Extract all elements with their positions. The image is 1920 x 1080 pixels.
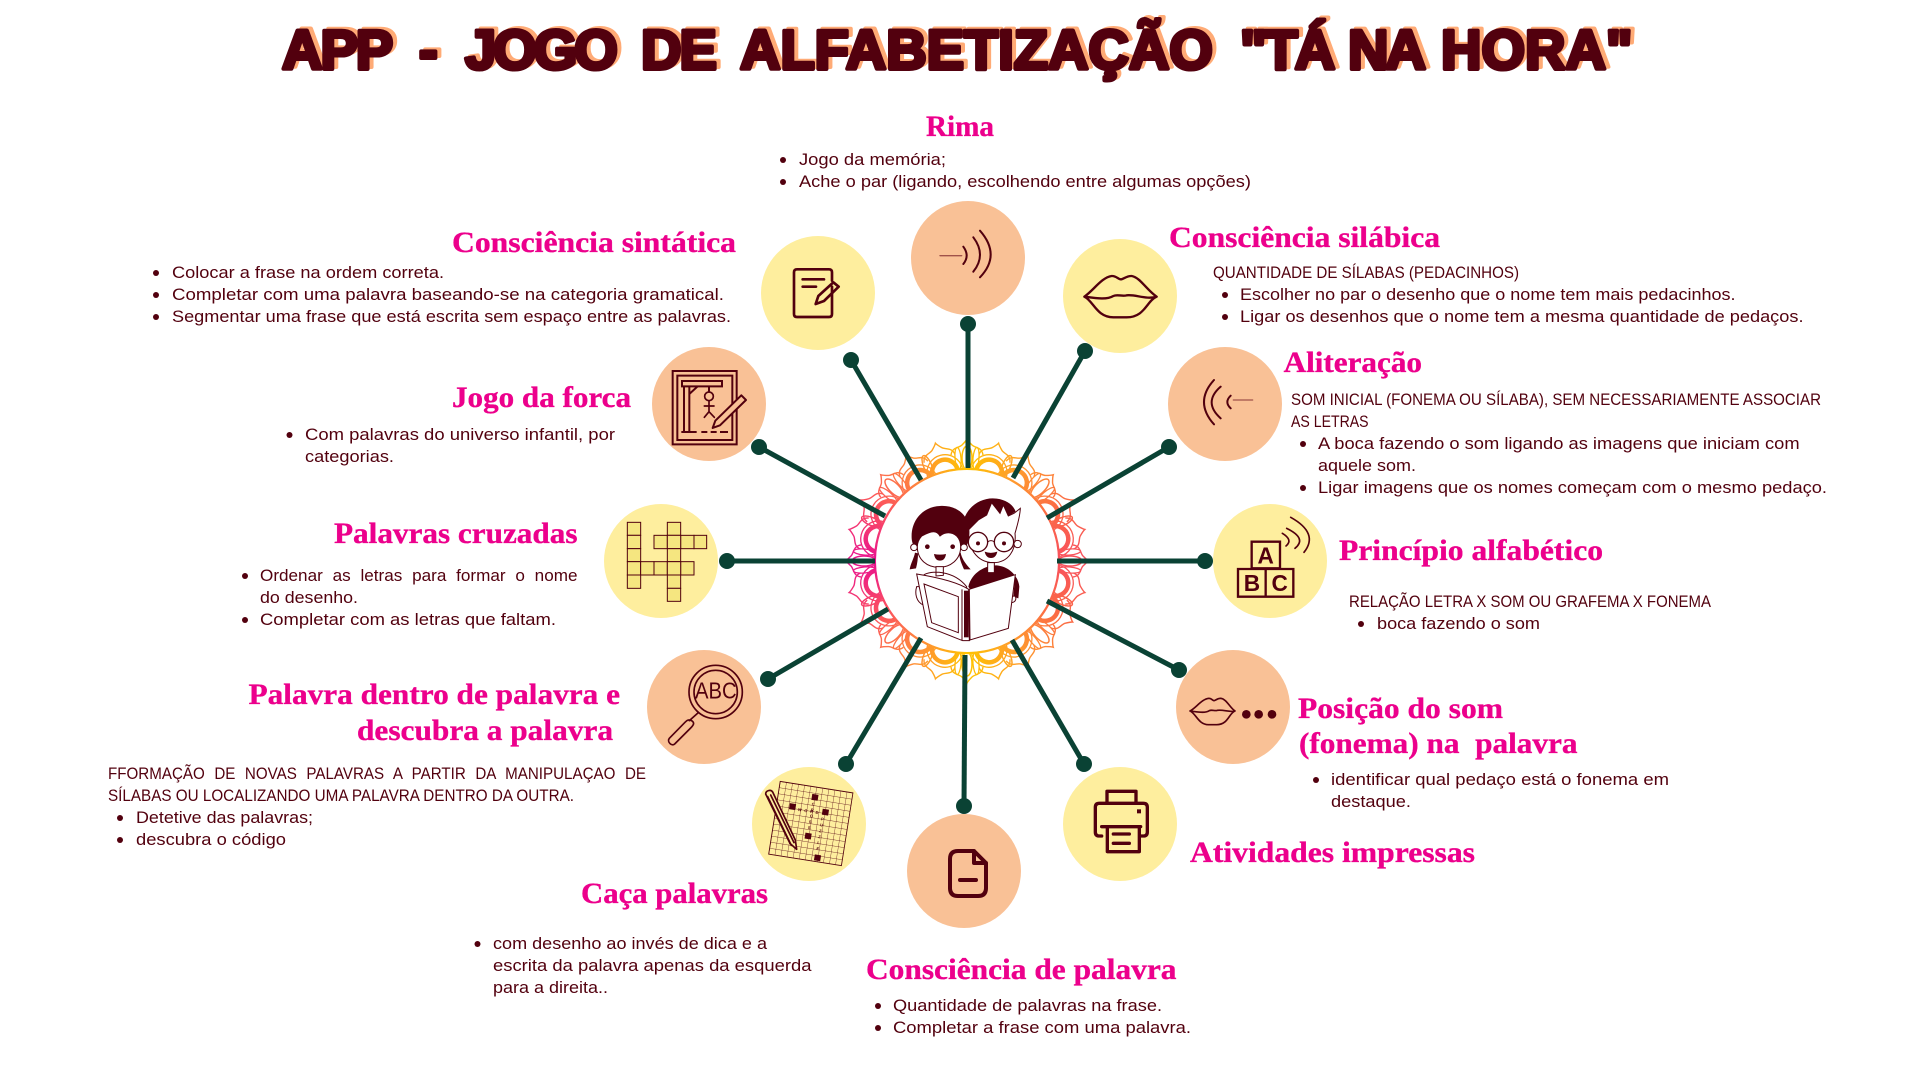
icon: lips and dots <box>1176 650 1290 764</box>
bullet list: Jogo da forca: Com palavras do universo infantil, por <box>305 425 615 444</box>
bullet list: Jogo da forca <box>286 425 615 466</box>
icon: printer <box>1063 767 1177 881</box>
bullet list: Rima <box>780 150 1251 191</box>
bullet list: Consciência sintática: Completar com uma palavra baseando-se na categoria gramatical. <box>172 285 724 304</box>
connector: Jogo da forca <box>751 439 885 516</box>
description and bullet list: FFORMAÇÃO DE NOVAS PALAVRAS A PARTIR DA MANIPULAÇAO DE <box>108 764 646 783</box>
bullet list: Jogo da forca: categorias. <box>305 447 394 466</box>
panel: Consciência silábica <box>1063 221 1804 353</box>
bullet list: Posição do som <box>1313 770 1669 811</box>
icon: crossword grid <box>604 504 718 618</box>
bullet list: Rima: Ache o par (ligando, escolhendo entre algumas opções) <box>799 172 1251 191</box>
bullet list: Consciência de palavra <box>875 996 1191 1037</box>
icon: magnifier ABC <box>647 650 761 764</box>
icon: document <box>907 814 1021 928</box>
heading: Posição do som (fonema) na palavra: (fonema) na palavra <box>1299 727 1578 760</box>
description and bullet list: AS LETRAS <box>1291 412 1369 431</box>
connector: Palavras cruzadas <box>719 553 875 569</box>
description and bullet list <box>1213 263 1804 326</box>
title: APP <box>282 18 392 81</box>
heading: Consciência silábica: Consciência silábica <box>1169 221 1440 254</box>
title: ALFABETIZAÇÃO <box>740 18 1213 81</box>
heading: Posição do som (fonema) na palavra: Posição do som <box>1298 692 1503 725</box>
heading: Palavra dentro de palavra e descubra a palavra: Palavra dentro de palavra e <box>248 678 620 711</box>
heading: Posição do som (fonema) na palavra <box>1298 692 1578 760</box>
panel: Rima <box>780 110 1251 315</box>
title: - <box>419 18 438 81</box>
bullet list: Palavras cruzadas: Completar com as letras que faltam. <box>260 610 556 629</box>
icon: sound waves <box>911 201 1025 315</box>
bullet list: Caça palavras <box>474 934 812 997</box>
title: JOGO <box>465 18 616 81</box>
description and bullet list <box>1349 592 1712 633</box>
bullet list: Caça palavras: para a direita.. <box>493 978 608 997</box>
bullet list: Consciência sintática: Colocar a frase na ordem correta. <box>172 263 444 282</box>
bullet list: Posição do som: destaque. <box>1331 792 1411 811</box>
panel: Consciência sintática <box>153 226 875 350</box>
title: DE <box>641 18 715 81</box>
heading: Palavra dentro de palavra e descubra a palavra <box>248 678 620 747</box>
description and bullet list: Ligar imagens que os nomes começam com o mesmo pedaço. <box>1318 478 1827 497</box>
heading: Caça palavras: Caça palavras <box>581 877 768 910</box>
central mandala <box>847 440 1087 684</box>
panel: Palavra dentro de palavra <box>108 650 761 849</box>
heading: Princípio alfabético: Princípio alfabético <box>1339 534 1603 567</box>
heading: Consciência de palavra: Consciência de palavra <box>866 953 1176 986</box>
heading: Palavra dentro de palavra e descubra a palavra: descubra a palavra <box>357 714 613 747</box>
description and bullet list <box>108 764 646 849</box>
icon: sound waves reversed <box>1168 347 1282 461</box>
description and bullet list: boca fazendo o som <box>1377 614 1540 633</box>
icon: alphabet blocks: B <box>1244 570 1260 596</box>
description and bullet list <box>1291 390 1827 497</box>
panel: Atividades impressas <box>1063 767 1475 881</box>
connector: Princípio alfabético <box>1057 553 1213 569</box>
description and bullet list: Escolher no par o desenho que o nome tem mais pedacinhos. <box>1240 285 1736 304</box>
icon: word search grid <box>752 767 866 881</box>
bullet list: Posição do som: identificar qual pedaço está o fonema em <box>1331 770 1669 789</box>
description and bullet list: QUANTIDADE DE SÍLABAS (PEDACINHOS) <box>1213 263 1519 282</box>
title: NA <box>1348 18 1424 81</box>
connector: Consciência silábica <box>1013 343 1093 478</box>
connector: Consciência de palavra <box>956 655 972 814</box>
heading: Atividades impressas: Atividades impressas <box>1190 836 1475 869</box>
connector: Atividades impressas <box>1012 640 1092 772</box>
connector: Palavra dentro de palavra <box>760 609 888 687</box>
icon: word search grid: PUZZLE <box>816 816 825 851</box>
icon: magnifier ABC: ABC <box>695 678 737 704</box>
icon: lips <box>1063 239 1177 353</box>
description and bullet list: Detetive das palavras; <box>136 808 313 827</box>
panel: Princípio alfabético <box>1213 504 1712 633</box>
heading: Aliteração: Aliteração <box>1284 346 1422 379</box>
bullet list: Consciência de palavra: Quantidade de palavras na frase. <box>893 996 1162 1015</box>
icon: word search grid: CROSS <box>808 801 815 830</box>
connector: Caça palavras <box>838 638 921 772</box>
bullet list: Palavras cruzadas <box>242 566 578 629</box>
description and bullet list: A boca fazendo o som ligando as imagens que iniciam com <box>1318 434 1800 453</box>
panel: Aliteração <box>1168 346 1827 497</box>
bullet list: Consciência de palavra: Completar a frase com uma palavra. <box>893 1018 1191 1037</box>
connector: Aliteração <box>1047 439 1177 518</box>
bullet list: Palavras cruzadas: do desenho. <box>260 588 358 607</box>
icon: alphabet blocks <box>1213 504 1327 618</box>
panel: Consciência de palavra <box>866 814 1191 1037</box>
illustration: children reading a book <box>910 498 1021 641</box>
bullet list: Caça palavras: escrita da palavra apenas da esquerda <box>493 956 812 975</box>
heading: Rima: Rima <box>926 110 994 143</box>
connector: Rima <box>960 316 976 468</box>
title: HORA" <box>1441 18 1632 81</box>
description and bullet list: RELAÇÃO LETRA X SOM OU GRAFEMA X FONEMA <box>1349 592 1712 611</box>
panel: Palavras cruzadas <box>242 504 718 629</box>
bullet list: Consciência sintática: Segmentar uma frase que está escrita sem espaço entre as palavras. <box>172 307 731 326</box>
description and bullet list: descubra o código <box>136 830 286 849</box>
description and bullet list: SOM INICIAL (FONEMA OU SÍLABA), SEM NECESSARIAMENTE ASSOCIAR <box>1291 390 1821 409</box>
panel: Posição do som <box>1176 650 1669 811</box>
icon: hangman <box>652 347 766 461</box>
panel: Caça palavras <box>474 767 866 997</box>
description and bullet list: Ligar os desenhos que o nome tem a mesma quantidade de pedaços. <box>1240 307 1804 326</box>
description and bullet list: SÍLABAS OU LOCALIZANDO UMA PALAVRA DENTRO DA OUTRA. <box>108 786 574 805</box>
connector: Posição do som <box>1047 601 1187 678</box>
heading: Palavras cruzadas: Palavras cruzadas <box>334 517 578 550</box>
connector: Consciência sintática <box>843 352 921 480</box>
icon: note and pencil <box>761 236 875 350</box>
bullet list: Palavras cruzadas: Ordenar as letras para formar o nome <box>260 566 578 585</box>
description and bullet list: aquele som. <box>1318 456 1416 475</box>
central white disc <box>876 470 1058 652</box>
heading: Consciência sintática: Consciência sintática <box>452 226 736 259</box>
heading: Jogo da forca: Jogo da forca <box>452 381 631 414</box>
bullet list: Consciência sintática <box>153 263 731 326</box>
bullet list: Caça palavras: com desenho ao invés de dica e a <box>493 934 768 953</box>
icon: word search grid: WORD <box>798 807 821 815</box>
icon: alphabet blocks: C <box>1271 570 1288 596</box>
icon: alphabet blocks: A <box>1257 542 1274 568</box>
bullet list: Rima: Jogo da memória; <box>799 150 946 169</box>
panel: Jogo da forca <box>286 347 766 466</box>
title: "TÁ <box>1240 18 1334 81</box>
